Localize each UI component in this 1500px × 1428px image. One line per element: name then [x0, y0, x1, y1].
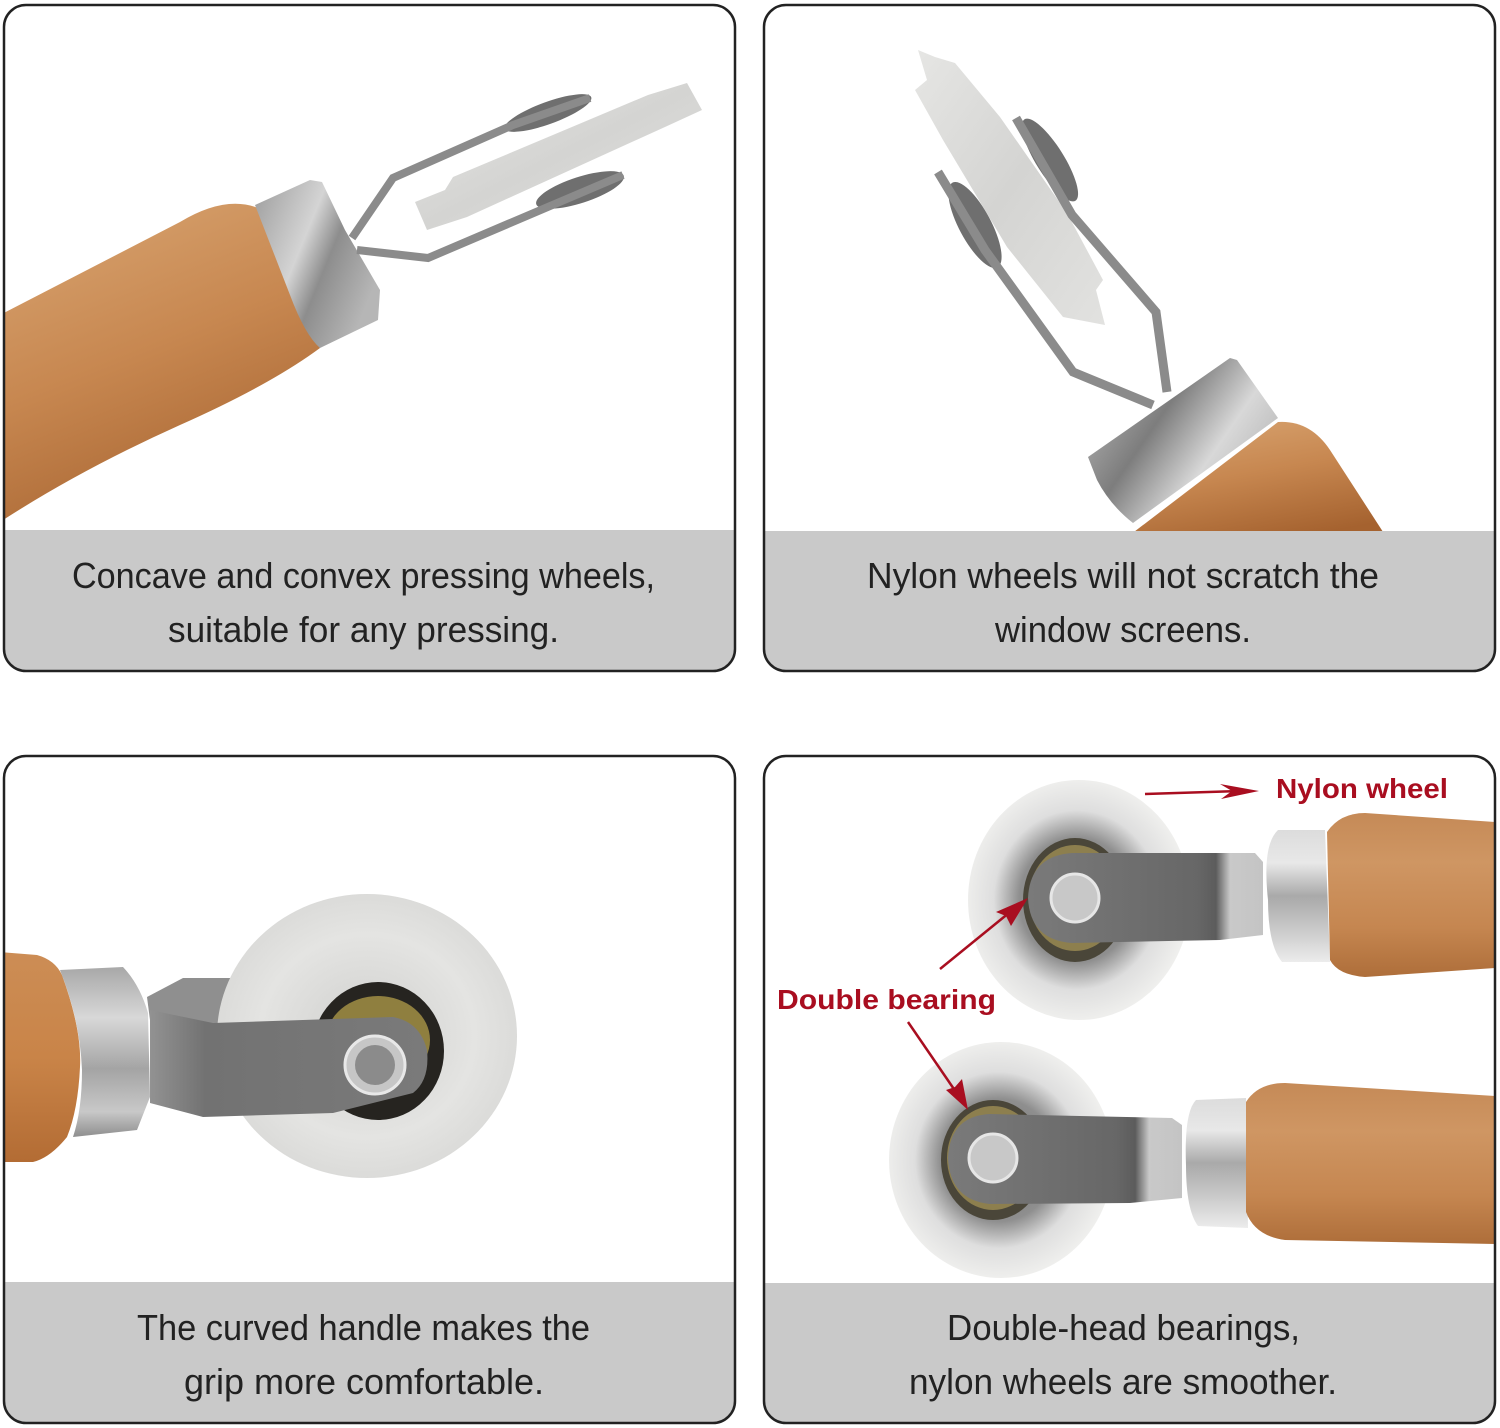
caption band — [764, 531, 1495, 672]
arrow: to upper bearing — [940, 898, 1028, 969]
panel: nylon wheels — [764, 5, 1495, 672]
caption text: Double-head bearings, — [947, 1307, 1300, 1348]
icon: bearing — [312, 982, 444, 1120]
panel: curved handle — [0, 756, 735, 1424]
panel: double bearings — [764, 756, 1495, 1424]
label: double bearing: Double bearing — [777, 984, 996, 1015]
icon: metal ferrule — [1088, 358, 1278, 523]
label: nylon wheel: Nylon wheel — [1276, 773, 1448, 804]
panel border — [764, 5, 1495, 671]
icon: axle washers — [948, 118, 1078, 268]
icon: metal ferrule — [255, 180, 380, 348]
panel border — [764, 756, 1495, 1423]
icon: axle washers — [506, 94, 624, 209]
icon: nylon wheel — [217, 894, 517, 1178]
caption text: grip more comfortable. — [184, 1361, 544, 1402]
icon: axle bolt — [345, 1036, 405, 1094]
caption band — [4, 530, 735, 672]
icon: upper tool — [968, 780, 1495, 1020]
caption text — [909, 1307, 1337, 1402]
icon: wooden handle — [0, 204, 320, 522]
caption text: Nylon wheels will not scratch the — [867, 555, 1379, 596]
icon: wire fork — [938, 118, 1167, 405]
caption text — [137, 1307, 590, 1402]
icon: nylon wheel — [415, 83, 702, 230]
caption text: window screens. — [994, 609, 1251, 650]
caption text — [72, 555, 655, 650]
icon: wooden handle — [0, 952, 80, 1162]
panel: concave and convex wheels — [0, 5, 735, 672]
icon: wire fork — [352, 98, 623, 258]
icon: wooden handle — [1130, 422, 1385, 535]
icon: metal arm — [150, 1010, 427, 1117]
caption text: suitable for any pressing. — [168, 609, 559, 650]
panel border — [4, 756, 735, 1423]
arrow: to lower bearing — [908, 1022, 968, 1110]
icon: back arm — [147, 978, 230, 1023]
caption text: The curved handle makes the — [137, 1307, 590, 1348]
caption text: Concave and convex pressing wheels, — [72, 555, 655, 596]
caption text — [867, 555, 1379, 650]
arrow: to nylon wheel label — [1145, 784, 1259, 799]
panel border — [4, 5, 735, 671]
caption text: nylon wheels are smoother. — [909, 1361, 1337, 1402]
icon: metal ferrule — [60, 967, 150, 1137]
icon: lower tool — [889, 1042, 1495, 1278]
icon: nylon wheel — [915, 50, 1105, 325]
caption band — [4, 1282, 735, 1424]
caption band — [764, 1283, 1495, 1424]
